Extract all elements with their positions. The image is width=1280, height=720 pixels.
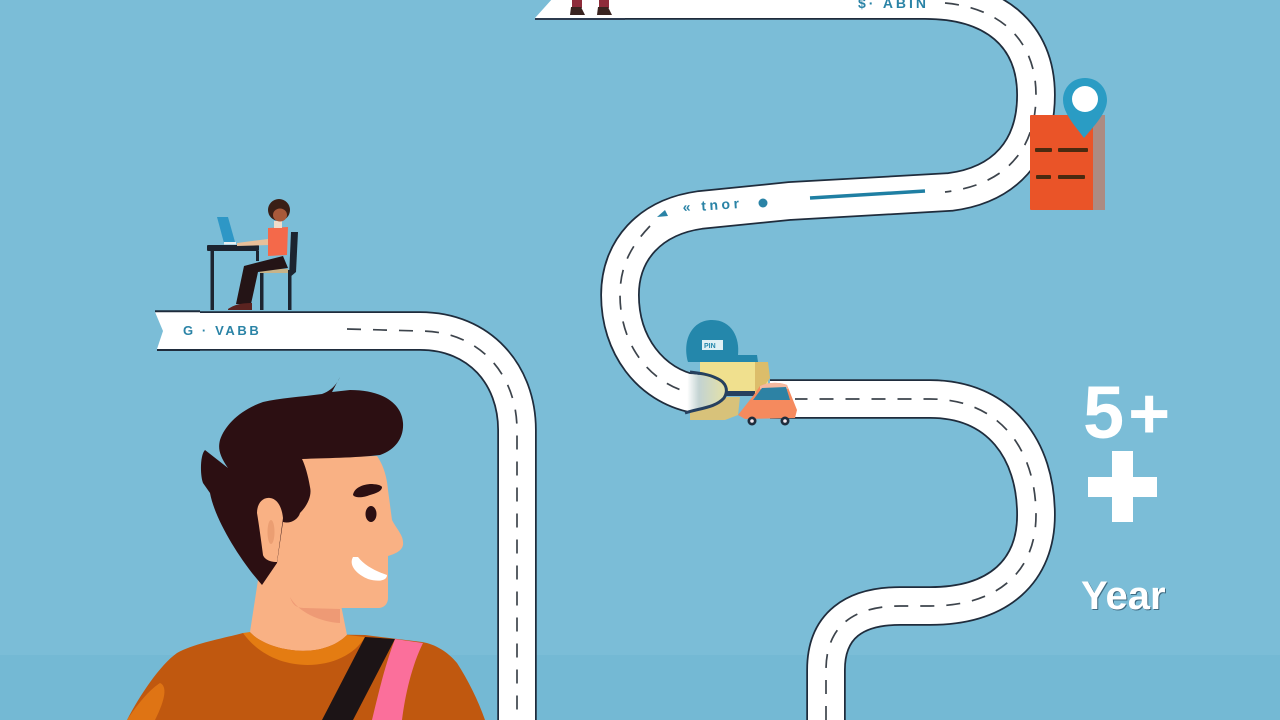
face [262,456,403,608]
icon: building with dome sign [686,320,770,420]
road cap: road end fading over building [687,374,727,412]
hair [201,377,403,585]
neck shadow [290,597,340,623]
ear [257,498,283,562]
feet of figure on top road [570,0,612,15]
road mark: small pin left of label [657,210,668,217]
illustration: smiling man [127,377,485,720]
icon: building with dome sign: PIN [704,343,716,350]
shirt sleeve highlight [127,683,164,720]
road label: middle road: « tnor [682,195,743,215]
eyebrow [353,484,382,497]
neck [250,580,347,651]
smile [352,557,387,581]
icon: dark road edge curve [685,372,726,413]
road mark: small pin right of label [758,198,768,208]
road segment: lower right winding road [770,399,1036,720]
icon: orange signboard [1030,115,1105,210]
road segment: left road with banner end [155,311,517,720]
icon: orange car [738,383,797,426]
icon: large plus [1088,451,1157,522]
black bag strap [322,637,395,720]
icon: location pin [1063,78,1107,138]
inner ear [268,520,274,544]
stat label: Year: Year [1081,574,1166,618]
stat number: 5+: 5+ [1083,371,1170,454]
shirt collar [243,632,365,665]
icon: person at desk with laptop [207,199,298,310]
eye [366,506,376,522]
road mark: blue progress line [810,191,925,198]
road segment: top winding road [535,0,1036,394]
shirt [127,633,485,720]
pink bag strap [372,639,423,720]
road label: left banner: G · VABB [183,323,261,338]
